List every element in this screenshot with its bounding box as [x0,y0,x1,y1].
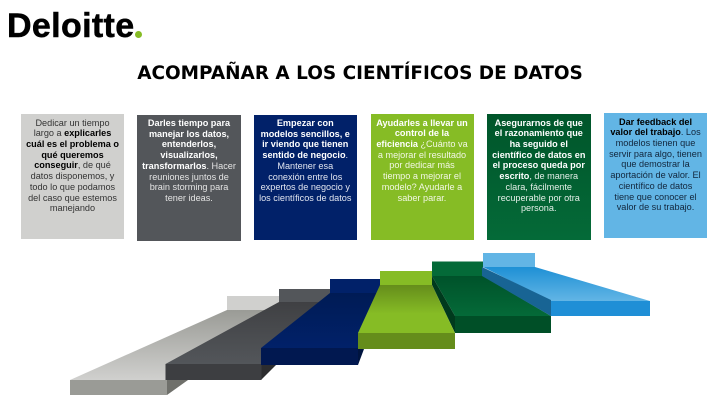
panel: card 1 explain the problem: todo lo que podamos [30,182,115,192]
panel: card 4 efficiency control: saber parar. [398,193,446,203]
panel: card 2 time to handle data: manejar los datos, [149,129,229,139]
panel: card 4 efficiency control: tiempo a mejorar el [383,171,461,181]
logo: Deloitte: Deloitte [7,7,134,45]
panel: card 5 written reasoning: científico de datos en [492,150,585,160]
panel: card 2 time to handle data: reuniones juntos de [149,172,229,182]
panel: card 5 written reasoning [487,114,590,240]
panel: card 5 written reasoning: escrito, de manera [499,171,578,181]
panel: card 5 written reasoning: persona. [521,203,556,213]
panel: card 1 explain the problem: qué queremos [41,150,104,160]
panel: card 1 explain the problem: del caso que estemos [28,193,117,203]
panel: card 5 written reasoning: recuperable por otra [498,193,580,203]
title: ACOMPAÑAR A LOS CIENTÍFICOS DE DATOS [137,63,583,84]
step 2: dark gray [166,289,330,380]
panel: card 6 value feedback: aportación de valor. El [610,170,701,180]
panel: card 6 value feedback: modelos tienen que [616,138,695,148]
panel: card 2 time to handle data: transformarlos. Hacer [142,161,236,171]
step 3: navy [261,279,380,365]
panel: card 3 simple models: modelos sencillos, e [261,129,350,139]
panel: card 5 written reasoning: el proceso queda por [493,160,585,170]
panel: card 4 efficiency control [370,114,474,240]
panel: card 1 explain the problem [21,114,124,239]
panel: card 2 time to handle data: entenderlos, [162,139,216,149]
panel: card 6 value feedback: que demostrar la [621,159,690,169]
panel: card 3 simple models: sentido de negocio. [262,150,348,160]
panel: card 3 simple models: ir viendo que tienen [262,139,348,149]
panel: card 4 efficiency control: eficiencia ¿Cuánto va [376,139,468,149]
panel: card 1 explain the problem: Dedicar un tiempo [35,118,110,128]
panel: card 3 simple models: Mantener esa [277,161,333,171]
panel: card 6 value feedback: valor del trabajo. Los [610,127,701,137]
panel: card 1 explain the problem: largo a explicarles [34,128,111,138]
panel: card 5 written reasoning: clara, fácilmente [506,182,572,192]
panel: card 4 efficiency control: Ayudarles a llevar un [376,118,468,128]
panel: card 1 explain the problem: datos disponemos, y [31,171,114,181]
step 5: green [432,262,551,333]
panel: card 5 written reasoning: ha seguido el [510,139,568,149]
panel: card 4 efficiency control: control de la [395,128,449,138]
panel: card 6 value feedback: valor de su trabajo. [617,202,694,212]
panel: card 2 time to handle data: Darles tiempo para [148,118,230,128]
panel: card 1 explain the problem: cuál es el problema o [26,139,119,149]
panel: card 6 value feedback: tiene que conocer el [614,192,697,202]
panel: card 3 simple models: conexión entre los [268,172,342,182]
panel: card 3 simple models [254,114,357,240]
panel: card 6 value feedback: Dar feedback del [619,116,692,126]
step 6: blue [482,253,650,316]
panel: card 4 efficiency control: por dedicar más [389,160,455,170]
panel: card 3 simple models: Empezar con [277,118,334,128]
panel: card 4 efficiency control: modelo? Ayudarle a [382,182,462,192]
panel: card 6 value feedback: científico de datos [619,181,692,191]
panel: card 2 time to handle data: tener ideas. [165,193,213,203]
panel: card 1 explain the problem: manejando [50,203,95,213]
panel: card 2 time to handle data: visualizarlos, [160,150,218,160]
panel: card 3 simple models: expertos de negocio y [261,182,350,192]
panel: card 2 time to handle data: brain storming para [150,182,228,192]
step 4: lime [358,271,455,349]
panel: card 4 efficiency control: a mejorar el resultado [378,150,466,160]
panel: card 6 value feedback: servir para algo, tienen [609,149,702,159]
panel: card 2 time to handle data [137,115,241,241]
panel: card 1 explain the problem: conseguir, de qué [34,160,111,170]
panel: card 3 simple models: los científicos de datos [259,193,351,203]
panel: card 6 value feedback [604,113,707,238]
panel: card 5 written reasoning: el razonamiento que [495,128,583,138]
step 1: gray [70,296,279,395]
panel: card 5 written reasoning: Asegurarnos de que [495,118,583,128]
